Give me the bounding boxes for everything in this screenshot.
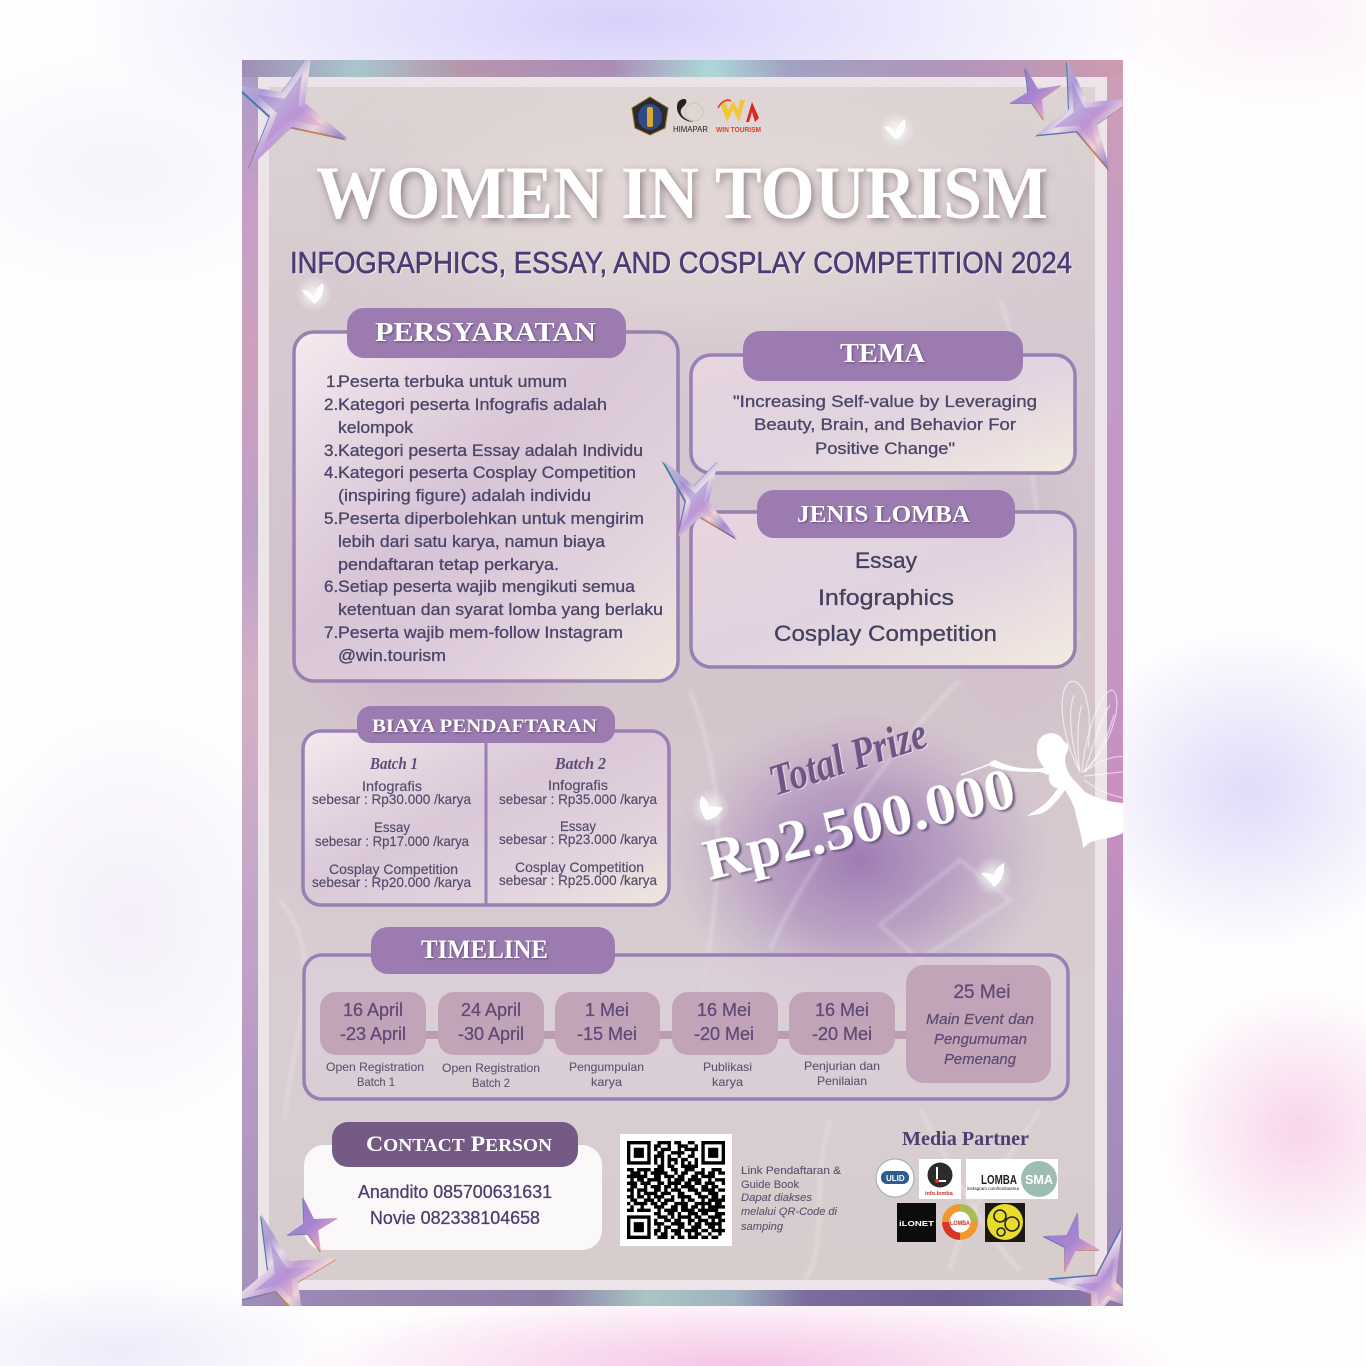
star: bottom right big — [1047, 1226, 1123, 1306]
requirements list: lebih dari satu karya, namun biaya — [338, 532, 606, 551]
inner poster panel — [269, 87, 1095, 1280]
requirements list: Kategori peserta Infografis adalah — [338, 395, 607, 414]
logo: lomba sma — [966, 1159, 1058, 1199]
qr caption — [741, 1165, 842, 1233]
logo: blue circle — [876, 1159, 914, 1197]
step: open registration batch 1: Batch 1 — [357, 1075, 395, 1089]
competition types: Essay — [855, 548, 917, 573]
icon: corner stars — [229, 50, 1145, 1322]
step: open registration batch 1: 16 April — [343, 1000, 403, 1020]
batch 2 fees — [499, 754, 657, 888]
step: publikasi karya — [672, 992, 778, 1089]
star: bottom left big — [242, 1214, 337, 1306]
requirements list: Setiap peserta wajib mengikuti semua — [338, 577, 636, 596]
step: pengumpulan karya: 1 Mei — [585, 1000, 629, 1020]
batch 2 fees: Infografis — [548, 777, 608, 793]
requirements list: 6. — [324, 577, 338, 596]
heading: jenis lomba: JENIS LOMBA — [797, 502, 971, 528]
qr caption: samping — [741, 1221, 784, 1233]
title: WOMEN IN TOURISM — [316, 152, 1048, 235]
batch 1 fees: sebesar : Rp17.000 /karya — [315, 833, 469, 849]
theme quote: Beauty, Brain, and Behavior For — [754, 415, 1016, 434]
batch 2 fees: sebesar : Rp23.000 /karya — [499, 831, 657, 847]
batch 2 fees: sebesar : Rp25.000 /karya — [499, 872, 657, 888]
heading: persyaratan — [347, 308, 626, 358]
heading: contact person: CONTACT PERSON — [366, 1131, 552, 1156]
requirements list — [324, 372, 663, 665]
icon: butterflies — [296, 112, 1013, 896]
panel: persyaratan — [294, 308, 678, 681]
heading: biaya — [357, 706, 615, 743]
logo: lomba sma: instagram.com/lombasma — [967, 1186, 1019, 1191]
logo: orange circle: LOMBA — [950, 1221, 971, 1227]
panel: timeline — [304, 927, 1068, 1099]
requirements list: 1. — [326, 372, 340, 391]
requirements list: Peserta diperbolehkan untuk mengirim — [338, 509, 644, 528]
step: publikasi karya: Publikasi — [703, 1060, 752, 1074]
step: pengumpulan karya: -15 Mei — [577, 1024, 637, 1044]
step: open registration batch 2: -30 April — [458, 1024, 524, 1044]
heading: timeline: TIMELINE — [421, 935, 548, 964]
logo: win tourism: WIN TOURISM — [716, 125, 761, 134]
step: publikasi karya: karya — [712, 1075, 743, 1089]
logo: lanet black — [897, 1203, 936, 1242]
logo: himapar: HIMAPAR — [673, 124, 708, 134]
media partner heading: Media Partner — [902, 1128, 1029, 1150]
batch 2 fees: sebesar : Rp35.000 /karya — [499, 791, 657, 807]
step: open registration batch 2: 24 April — [461, 1000, 521, 1020]
step: open registration batch 2: Batch 2 — [472, 1076, 510, 1090]
total prize label: Total Prize — [763, 709, 933, 806]
theme quote: Positive Change" — [815, 439, 955, 458]
panel: tema — [691, 331, 1075, 473]
requirements list: (inspiring figure) adalah individu — [338, 486, 591, 505]
qr caption: Dapat diakses — [741, 1192, 812, 1204]
theme quote: "Increasing Self-value by Leveraging — [733, 392, 1037, 411]
requirements list: @win.tourism — [338, 646, 446, 665]
step: penjurian dan penilaian: Penjurian dan — [804, 1059, 880, 1073]
requirements list: Kategori peserta Cosplay Competition — [338, 463, 636, 482]
step: open registration batch 1: Open Registration — [326, 1060, 424, 1074]
batch 1 fees: Batch 1 — [369, 754, 418, 773]
logo: orange circle — [942, 1204, 978, 1240]
batch 1 fees — [312, 754, 471, 890]
logo: lomba sma: SMA — [1025, 1172, 1054, 1187]
step: penjurian dan penilaian: 16 Mei — [815, 1000, 869, 1020]
batch 1 fees: Infografis — [362, 778, 422, 794]
contact names: Anandito 085700631631 — [358, 1182, 552, 1202]
logo: lanet black: iLONET — [899, 1221, 935, 1228]
batch 1 fees: Cosplay Competition — [329, 861, 458, 877]
requirements list: 3. — [324, 441, 338, 460]
batch 2 fees: Essay — [560, 818, 596, 834]
panel: biaya pendaftaran — [303, 706, 669, 905]
qr caption: Link Pendaftaran & — [741, 1165, 842, 1177]
star: bottom left small — [286, 1197, 338, 1253]
requirements list: pendaftaran tetap perkarya. — [338, 555, 559, 574]
star: top right big — [1035, 60, 1123, 172]
step: main event — [906, 965, 1051, 1083]
step: penjurian dan penilaian — [789, 992, 895, 1088]
prize amount: Rp2.500.000 — [697, 755, 1021, 893]
logo: blue circle: ULID — [886, 1174, 905, 1183]
competition types: Infographics — [818, 585, 954, 610]
logo: lomba sma: LOMBA — [981, 1172, 1017, 1187]
requirements list: kelompok — [338, 418, 414, 437]
requirements list: 4. — [324, 463, 338, 482]
requirements list: 7. — [324, 623, 338, 642]
step: pengumpulan karya: karya — [591, 1075, 622, 1089]
logo: info lomba — [919, 1159, 961, 1199]
panel: jenis lomba — [691, 490, 1075, 667]
step: open registration batch 1: -23 April — [340, 1024, 406, 1044]
subtitle: INFOGRAPHICS, ESSAY, AND COSPLAY COMPETITION 2024 — [290, 245, 1072, 280]
icon: fairy — [961, 681, 1125, 848]
theme quote — [733, 392, 1037, 458]
step: penjurian dan penilaian: Penilaian — [817, 1074, 867, 1088]
contact names: Novie 082338104658 — [370, 1208, 540, 1228]
batch 1 fees: sebesar : Rp20.000 /karya — [312, 874, 471, 890]
logo: university shield — [632, 97, 668, 135]
step: pengumpulan karya — [555, 992, 660, 1089]
step: main event: Pengumuman — [934, 1031, 1027, 1048]
contact names — [358, 1182, 552, 1228]
qr code — [620, 1134, 732, 1246]
step: open registration batch 2 — [438, 992, 544, 1090]
step: open registration batch 2: Open Registration — [442, 1061, 540, 1075]
batch 1 fees: sebesar : Rp30.000 /karya — [312, 791, 471, 807]
heading: tema — [743, 331, 1023, 381]
logos row — [632, 97, 761, 135]
step: main event: Main Event dan — [926, 1011, 1034, 1028]
batch 2 fees: Batch 2 — [554, 754, 606, 773]
qr caption: Guide Book — [741, 1179, 800, 1191]
step: main event: 25 Mei — [953, 982, 1011, 1003]
star: top right small — [1009, 67, 1062, 121]
requirements list: Kategori peserta Essay adalah Individu — [338, 441, 643, 460]
poster frame — [242, 60, 1123, 1306]
requirements list: Peserta terbuka untuk umum — [338, 372, 567, 391]
heading: jenis lomba — [757, 490, 1015, 538]
batch 1 fees: Essay — [374, 819, 410, 835]
step: penjurian dan penilaian: -20 Mei — [812, 1024, 872, 1044]
qr caption: melalui QR-Code di — [741, 1206, 838, 1218]
requirements list: 2. — [324, 395, 338, 414]
heading: biaya: BIAYA PENDAFTARAN — [372, 716, 597, 737]
media partner logos — [876, 1159, 1058, 1242]
connector line — [420, 1031, 910, 1039]
panel: contact person — [304, 1122, 602, 1250]
competition types — [774, 548, 997, 646]
star: top left — [242, 60, 348, 170]
requirements list: ketentuan dan syarat lomba yang berlaku — [338, 600, 663, 619]
step: open registration batch 1 — [320, 992, 426, 1089]
heading: persyaratan: PERSYARATAN — [375, 317, 597, 347]
competition types: Cosplay Competition — [774, 621, 997, 646]
icon: center star — [662, 460, 738, 540]
requirements list: 5. — [324, 509, 338, 528]
heading: timeline — [371, 927, 615, 974]
step: main event: Pemenang — [944, 1051, 1017, 1068]
heading: contact person — [332, 1122, 578, 1167]
heading: tema: TEMA — [840, 338, 926, 368]
step: publikasi karya: 16 Mei — [697, 1000, 751, 1020]
batch 2 fees: Cosplay Competition — [515, 859, 644, 875]
logo: info lomba: info.lomba — [925, 1191, 954, 1197]
step: publikasi karya: -20 Mei — [694, 1024, 754, 1044]
requirements list: Peserta wajib mem-follow Instagram — [338, 623, 623, 642]
star: bottom right small — [1042, 1212, 1100, 1273]
step: pengumpulan karya: Pengumpulan — [569, 1060, 644, 1074]
logo: yellow badge — [985, 1203, 1025, 1242]
